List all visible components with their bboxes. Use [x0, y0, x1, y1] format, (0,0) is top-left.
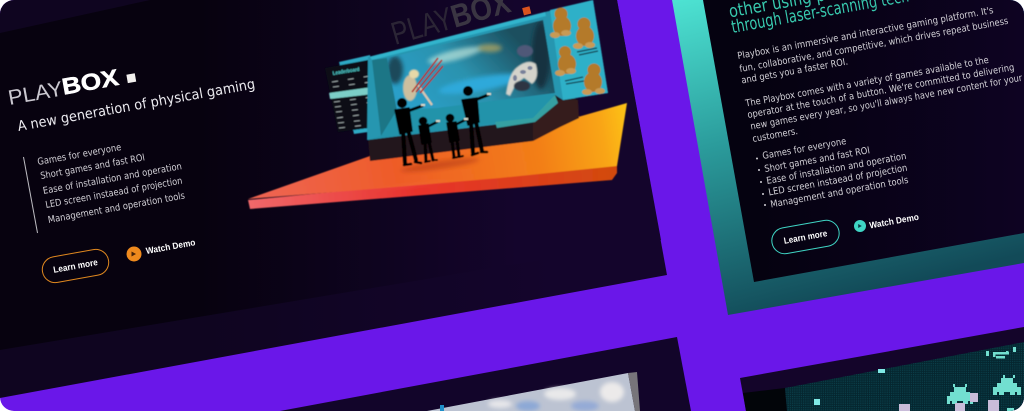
- feature list divider: [24, 157, 38, 233]
- player 3: [446, 114, 465, 158]
- game scene top glow: [427, 43, 483, 67]
- cabinet base right side: [533, 100, 579, 141]
- gun highlights: [421, 93, 491, 122]
- button: Learn more teal: [770, 218, 841, 256]
- cabinet teal frame: [367, 0, 608, 140]
- link: Watch Demo teal: Watch Demo: [869, 212, 920, 230]
- invader accent: [1007, 408, 1014, 411]
- left monster head: [409, 70, 419, 78]
- feature list: Games for everyone: [37, 142, 122, 168]
- panel: bottom middle slide: [280, 337, 691, 411]
- right creature shadow: [514, 81, 530, 91]
- teal slide first paragraph: Playbox is an immersive and interactive gaming platform. It's: [737, 5, 994, 62]
- slide image grey edge: [628, 372, 640, 411]
- cabinet textured step: [495, 95, 558, 128]
- leaderboard: [325, 55, 376, 134]
- link: Watch Demo: Watch Demo: [145, 237, 197, 256]
- teal slide bullet list: Games for everyone: [762, 136, 847, 162]
- cabinet lower shelf: [368, 105, 480, 141]
- cabinet top strip: [370, 12, 546, 60]
- bear 2: [573, 18, 595, 49]
- logo: PLAYBOX: [8, 68, 120, 105]
- panel: teal slide: [672, 0, 1024, 315]
- right creature head: [517, 45, 533, 57]
- space invader 3 fragment: [986, 347, 1016, 358]
- teal slide bullet list: Ease of installation and operation: [766, 151, 907, 187]
- panel inner dark area: [0, 0, 661, 350]
- bear 1: [550, 8, 571, 38]
- game scene dark corner: [532, 21, 550, 89]
- barrier side block: [970, 393, 978, 402]
- teal slide bullet list: LED screen instaead of projection: [768, 163, 908, 198]
- ghost logo behind the stage: [391, 0, 512, 44]
- game screen: [785, 342, 1024, 411]
- slide background: [280, 337, 691, 411]
- silhouettes: [395, 86, 488, 165]
- slide background: [740, 327, 1024, 411]
- teal slide bullet list: Short games and fast ROI: [764, 145, 871, 175]
- bear shelf panel: [550, 0, 608, 100]
- dark left strip: [743, 388, 787, 411]
- panel: bottom right slide: [740, 327, 1024, 411]
- icon: orange play button: [126, 246, 142, 262]
- game screen: [388, 20, 556, 110]
- red claws: [412, 58, 443, 93]
- feature list: [37, 142, 186, 226]
- logo: PLAYBOX: PLAY: [6, 78, 65, 110]
- left monster: [403, 75, 417, 101]
- illustration: game stage: [248, 0, 627, 209]
- right creature: [506, 62, 537, 96]
- leaderboard board: [325, 60, 368, 132]
- game scene dark left: [387, 56, 403, 84]
- platform glow: [300, 178, 470, 197]
- button: Learn more: [40, 247, 111, 285]
- space invader 1: [947, 384, 973, 404]
- teal slide first paragraph: and gets you a faster ROI.: [741, 57, 849, 86]
- game screen pixel mesh: [785, 342, 1024, 411]
- leaderboard top tab: [339, 55, 371, 66]
- button: Learn more: Learn more: [52, 257, 99, 275]
- teal slide second paragraph: customers.: [752, 126, 799, 145]
- subtitle: A new generation of physical gaming: [16, 77, 256, 135]
- logo square: [126, 73, 136, 83]
- space invader shots: [814, 369, 885, 405]
- leaderboard highlight: [329, 87, 373, 99]
- cabinet base: [367, 90, 579, 161]
- teal slide dark area: [703, 0, 1024, 282]
- bear shelf lines: [565, 48, 598, 84]
- button: Learn more teal: Learn more: [783, 228, 828, 246]
- player 4: [462, 86, 488, 155]
- panel frame: [0, 0, 667, 398]
- ghost logo square: [522, 6, 531, 15]
- bear 3: [555, 46, 576, 76]
- feature list: Management and operation tools: [47, 191, 186, 226]
- teal frame: [672, 0, 1024, 315]
- slide image highlights: [488, 382, 624, 411]
- figure shadows: [400, 155, 480, 175]
- stage platform edge: [248, 165, 617, 209]
- player 2: [419, 117, 437, 162]
- feature list: LED screen instaead of projection: [45, 176, 183, 211]
- teal slide bullet list: Management and operation tools: [770, 175, 909, 210]
- leaderboard rows: [332, 76, 375, 128]
- game scene amber light: [478, 44, 502, 52]
- left monster limb: [418, 85, 432, 105]
- logo: PLAYBOX: BOX: [60, 64, 121, 100]
- slide image: [427, 373, 635, 411]
- space invader 2: [993, 375, 1021, 395]
- icon: teal play button: [854, 220, 866, 232]
- bullet dots: [756, 158, 766, 206]
- player 1: [395, 98, 422, 165]
- panel: main Playbox slide: [0, 0, 667, 398]
- blue accent: [440, 405, 444, 411]
- right creature mottling: [513, 66, 532, 81]
- teal slide second paragraph: The Playbox comes with a variety of games available to the: [744, 55, 990, 110]
- leaderboard title: Leaderboard: [332, 67, 360, 77]
- game scene water: [438, 71, 512, 96]
- feature list: Short games and fast ROI: [40, 152, 146, 182]
- bears: [550, 8, 605, 95]
- teal slide bullet list: [756, 136, 909, 210]
- barriers: [899, 400, 999, 411]
- cabinet left inner wall: [372, 58, 397, 136]
- leaderboard bottom tab: [352, 128, 368, 135]
- bear 4: [582, 64, 605, 95]
- feature list: Ease of installation and operation: [42, 161, 183, 197]
- stage platform top: [248, 103, 627, 199]
